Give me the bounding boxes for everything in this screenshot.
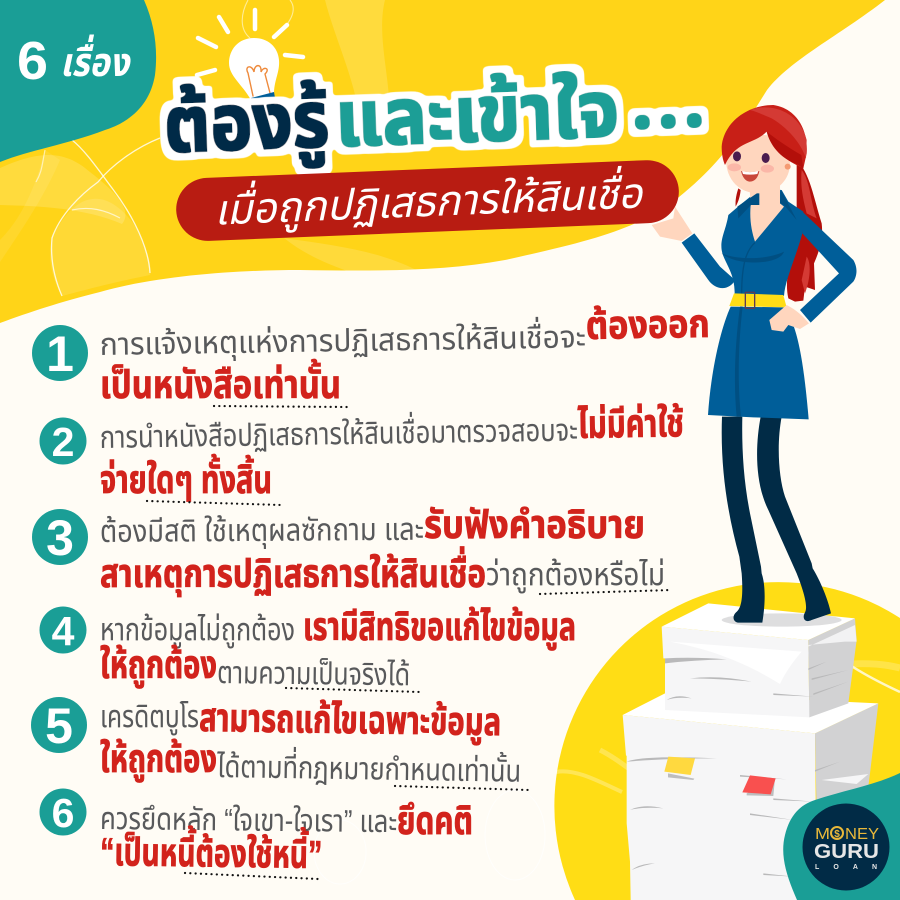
head (726, 133, 790, 193)
item 5 text: ให้ถูกต้อง (100, 738, 217, 782)
lower stack (623, 693, 878, 900)
item 3 text: รับฟังคำอธิบาย (424, 504, 645, 547)
torso (721, 190, 803, 296)
logo: M (815, 826, 830, 843)
yellow header wave (0, 0, 885, 323)
corner label: 6 เรื่อง (17, 31, 131, 91)
number 5 (31, 697, 87, 754)
number 3: 3 (46, 510, 74, 566)
item 1 text: การแจ้งเหตุแห่งการปฏิเสธการให้สินเชื่อจะ (99, 315, 586, 363)
item 4 text: เรามีสิทธิขอแก้ไขข้อมูล (303, 606, 576, 650)
item 6 text: “เป็นหนี้ต้องใช้หนี้” (100, 824, 323, 877)
right arm and hand (800, 212, 856, 323)
woman (652, 105, 856, 419)
item 3 text: สาเหตุการปฏิเสธการให้สินเชื่อ (100, 546, 486, 597)
logo: GURU (814, 841, 879, 863)
teal corner top left (0, 0, 156, 162)
number 3 (32, 509, 88, 566)
item 2 text (99, 402, 684, 505)
main title: ต้องรู้ (163, 75, 331, 173)
red subtitle pill: เมื่อถูกปฏิเสธการให้สินเชื่อ (213, 164, 645, 237)
item 1 text: เป็นหนังสือเท่านั้น (100, 358, 341, 407)
item 4 text: หากข้อมูลไม่ถูกต้อง (100, 612, 295, 648)
number 1 (32, 325, 88, 382)
item 5 text: สามารถแก้ไขเฉพาะข้อมูล (199, 697, 501, 745)
number 4 (40, 606, 86, 654)
hair back (787, 160, 822, 302)
corner label: 6 เรื่อง: 6 (17, 31, 48, 91)
item 4 text: ตามความเป็นจริงได้ (217, 655, 410, 692)
item 3 text: ต้องมีสติ ใช้เหตุผลซักถาม และ (100, 512, 424, 550)
number 2 (40, 418, 86, 465)
belt (729, 293, 787, 307)
logo (802, 804, 890, 890)
sticky notes (664, 757, 776, 796)
item 4 text (100, 606, 576, 692)
item 5 text: เครดิตบูโร (100, 699, 199, 735)
number 5: 5 (45, 698, 73, 754)
number 6: 6 (52, 790, 74, 836)
number 4: 4 (52, 608, 75, 654)
main title: และเข้าใจ (333, 65, 620, 163)
number 1: 1 (46, 326, 74, 382)
smoke decoration top (0, 0, 420, 296)
collar (737, 189, 797, 220)
logo: L O A N (815, 864, 877, 871)
left arm and hand (682, 233, 735, 288)
upper stack (662, 603, 857, 717)
yellow circle bottom right (554, 582, 900, 900)
item 2 text: ไม่มีค่าใช้ (577, 402, 684, 447)
red subtitle pill (175, 159, 680, 242)
item 6 text (100, 800, 473, 879)
item 6 text: ยึดคติ (397, 800, 473, 843)
item 5 text: ได้ตามที่กฎหมายกำหนดเท่านั้น (216, 745, 521, 789)
number 6 (40, 788, 86, 836)
paper stack (623, 603, 878, 900)
logo: $ (834, 829, 840, 840)
item 1 text (99, 303, 710, 407)
corner label: 6 เรื่อง: เรื่อง (60, 34, 131, 85)
item 5 text (100, 697, 529, 790)
item 1 text: ต้องออก (585, 303, 710, 348)
item 3 text (100, 504, 672, 597)
smoke decoration bottom (314, 664, 900, 884)
item 3 text: ว่าถูกต้องหรือไม่ (486, 557, 665, 593)
teal corner bottom right (783, 773, 900, 900)
icon: light bulb (197, 10, 303, 116)
shadow under feet (722, 613, 842, 627)
item 4 text: ให้ถูกต้อง (100, 644, 217, 688)
logo: NEY (845, 826, 879, 843)
item 2 text: การนำหนังสือปฏิเสธการให้สินเชื่อมาตรวจสอบจะ (99, 409, 578, 455)
item 2 text: จ่ายใดๆ ทั้งสิ้น (100, 453, 272, 502)
skirt (708, 307, 809, 419)
hair top (722, 105, 807, 168)
number 2: 2 (52, 419, 74, 465)
main title (163, 62, 702, 173)
item 6 text: ควรยึดหลัก “ใจเขา-ใจเรา” และ (100, 801, 397, 839)
neck and chest (749, 178, 784, 242)
woman legs (722, 417, 831, 623)
